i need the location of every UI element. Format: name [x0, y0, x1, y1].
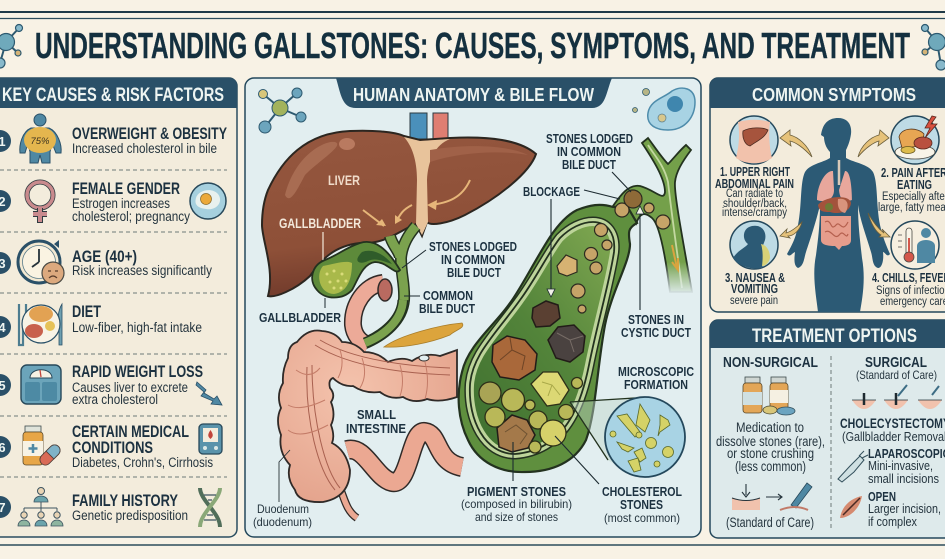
item: female gender: [27, 179, 226, 224]
label: gallbladder: GALLBLADDER: [259, 310, 342, 325]
item: family history: Genetic predisposition: [72, 508, 188, 523]
heading: human anatomy: HUMAN ANATOMY & BILE FLOW: [353, 84, 594, 105]
intestine: [278, 279, 463, 518]
item: rapid weight loss: extra cholesterol: [72, 392, 158, 407]
label: cholesterol stones: (most common): [604, 511, 680, 525]
panel: common symptoms: [710, 78, 945, 312]
treatment: surgical: Mini-invasive,: [868, 458, 933, 473]
arrows: symptoms: [780, 130, 890, 238]
liver: [262, 113, 536, 296]
stone in duct: [624, 190, 642, 208]
item: diet: Low-fiber, high-fat intake: [72, 320, 202, 335]
item: rapid weight loss: [21, 362, 222, 407]
microscopic formation inset: [570, 396, 685, 478]
treatment: surgical: SURGICAL: [865, 354, 927, 371]
treatment: non-surgical: NON-SURGICAL: [723, 354, 818, 371]
label: common bile duct: [419, 288, 475, 316]
panel: human anatomy and bile flow: [245, 78, 701, 537]
symptom 1: upper right abdominal pain: Can radiate to: [726, 188, 783, 200]
label: microscopic formation: FORMATION: [624, 377, 688, 392]
labels: anatomy callouts: [253, 131, 694, 529]
symptom 1: upper right abdominal pain: intense/crampy: [722, 207, 787, 219]
symptom 1: upper right abdominal pain: 1. UPPER RIGHT: [720, 165, 790, 179]
label: microscopic formation: MICROSCOPIC: [618, 364, 694, 379]
label: duodenum: (duodenum): [253, 515, 312, 529]
label: blockage: [523, 184, 620, 297]
label: stones lodged top: STONES LODGED: [546, 131, 633, 146]
label: stones lodged top: IN COMMON: [557, 144, 621, 159]
item: certain medical conditions: Diabetes, Crohn's, Cirrhosis: [72, 455, 213, 470]
label: pigment stones: and size of stones: [475, 510, 558, 524]
item: female gender: Estrogen increases: [72, 196, 170, 211]
item: rapid weight loss: RAPID WEIGHT LOSS: [72, 362, 203, 381]
symptom 3: nausea and vomiting: 3. NAUSEA &: [725, 271, 785, 285]
label: stones in cystic duct: CYSTIC DUCT: [621, 325, 691, 340]
symptom 3: nausea and vomiting: VOMITING: [731, 282, 778, 296]
item: female gender: cholesterol; pregnancy: [72, 209, 190, 224]
symptom 2: pain after eating: EATING: [897, 178, 932, 192]
label: common bile duct: BILE DUCT: [419, 301, 475, 316]
large gallbladder cross-section with ducts: [459, 138, 696, 478]
item: age: AGE (40+): [72, 247, 137, 266]
panel: key causes and risk factors: [0, 78, 237, 537]
label: stones lodged centre: [429, 239, 517, 280]
item: overweight and obesity: OVERWEIGHT & OBESITY: [72, 124, 227, 143]
item: certain medical conditions: CERTAIN MEDICAL: [72, 422, 189, 441]
body figure: [787, 118, 890, 312]
treatment: non-surgical: or stone crushing: [727, 446, 814, 461]
label: blockage: BLOCKAGE: [523, 184, 580, 199]
label: stones lodged centre: STONES LODGED: [429, 239, 517, 254]
symptom 3: nausea and vomiting: severe pain: [730, 295, 778, 307]
item: diet: DIET: [72, 302, 101, 321]
label: pigment stones: (composed in bilirubin): [461, 497, 572, 511]
treatment: surgical: OPEN: [868, 489, 896, 504]
label: duodenum: [253, 450, 312, 529]
symptom 1: upper right abdominal pain: ABDOMINAL PAIN: [715, 177, 794, 191]
item: rapid weight loss: Causes liver to excrete: [72, 380, 188, 395]
symptom 2: pain after eating: [878, 116, 945, 214]
small gallbladder and common bile duct: [312, 226, 416, 344]
item: family history: FAMILY HISTORY: [72, 491, 178, 510]
item: age: Risk increases significantly: [72, 263, 212, 278]
label: small intestine: [346, 407, 406, 436]
treatment: non-surgical: (Standard of Care): [726, 515, 814, 530]
label: cholesterol stones: CHOLESTEROL: [602, 484, 682, 499]
label: small intestine: INTESTINE: [346, 421, 406, 436]
label: stones lodged centre: BILE DUCT: [447, 265, 501, 280]
treatment: non-surgical: dissolve stones (rare),: [716, 434, 825, 449]
label: liver: LIVER: [328, 172, 360, 188]
label: pigment stones: PIGMENT STONES: [467, 484, 566, 499]
icon: molecule left: [0, 24, 22, 68]
label: microscopic formation: [618, 364, 694, 392]
symptom 4: chills and fever: [872, 221, 945, 308]
label: stones in cystic duct: STONES IN: [628, 312, 684, 327]
label: cholesterol stones: STONES: [620, 497, 663, 512]
heading: key causes: KEY CAUSES & RISK FACTORS: [2, 85, 224, 106]
item: female gender: FEMALE GENDER: [72, 179, 180, 198]
label: cholesterol stones: [555, 436, 682, 525]
label: stones lodged centre: IN COMMON: [441, 252, 505, 267]
item: age: [18, 240, 212, 284]
label: stones lodged top: BILE DUCT: [562, 157, 616, 172]
stones: small tan: [557, 203, 670, 313]
label: pigment stones: [461, 442, 572, 524]
label: stones in cystic duct: [621, 206, 691, 340]
label: small intestine: SMALL: [357, 407, 396, 422]
label: stones lodged top: [546, 131, 633, 192]
item: overweight and obesity: Increased cholesterol in bile: [72, 141, 217, 156]
label: gallbladder on liver: GALLBLADDER: [279, 215, 361, 231]
treatment: surgical: [838, 354, 945, 529]
symptom 1: upper right abdominal pain: [715, 116, 794, 219]
treatment: non-surgical: Medication to: [736, 420, 804, 435]
stones: yellow cholesterol: [479, 372, 582, 453]
item: certain medical conditions: CONDITIONS: [72, 438, 153, 457]
icon: cell: [632, 88, 695, 130]
symptom 1: upper right abdominal pain: shoulder/back,: [723, 198, 787, 210]
panel: treatment options: [710, 320, 945, 538]
item: overweight and obesity: 75%: [30, 136, 50, 147]
treatment: non-surgical: (less common): [735, 459, 806, 474]
symptom 3: nausea and vomiting: [725, 221, 785, 307]
item: family history: [18, 488, 220, 527]
stones: dark pigment: [492, 301, 585, 452]
icon: molecule: [258, 88, 306, 133]
label: common bile duct: COMMON: [423, 288, 473, 303]
icon: molecule right: [922, 24, 945, 70]
number badges: [0, 130, 11, 518]
item: diet: [19, 302, 202, 345]
item: certain medical conditions: [23, 422, 222, 470]
heading: common symptoms: COMMON SYMPTOMS: [752, 84, 916, 105]
label: duodenum: Duodenum: [257, 502, 309, 516]
item: overweight and obesity: [20, 114, 227, 163]
treatment: surgical: if complex: [868, 514, 917, 529]
treatment: non-surgical: [716, 354, 825, 530]
